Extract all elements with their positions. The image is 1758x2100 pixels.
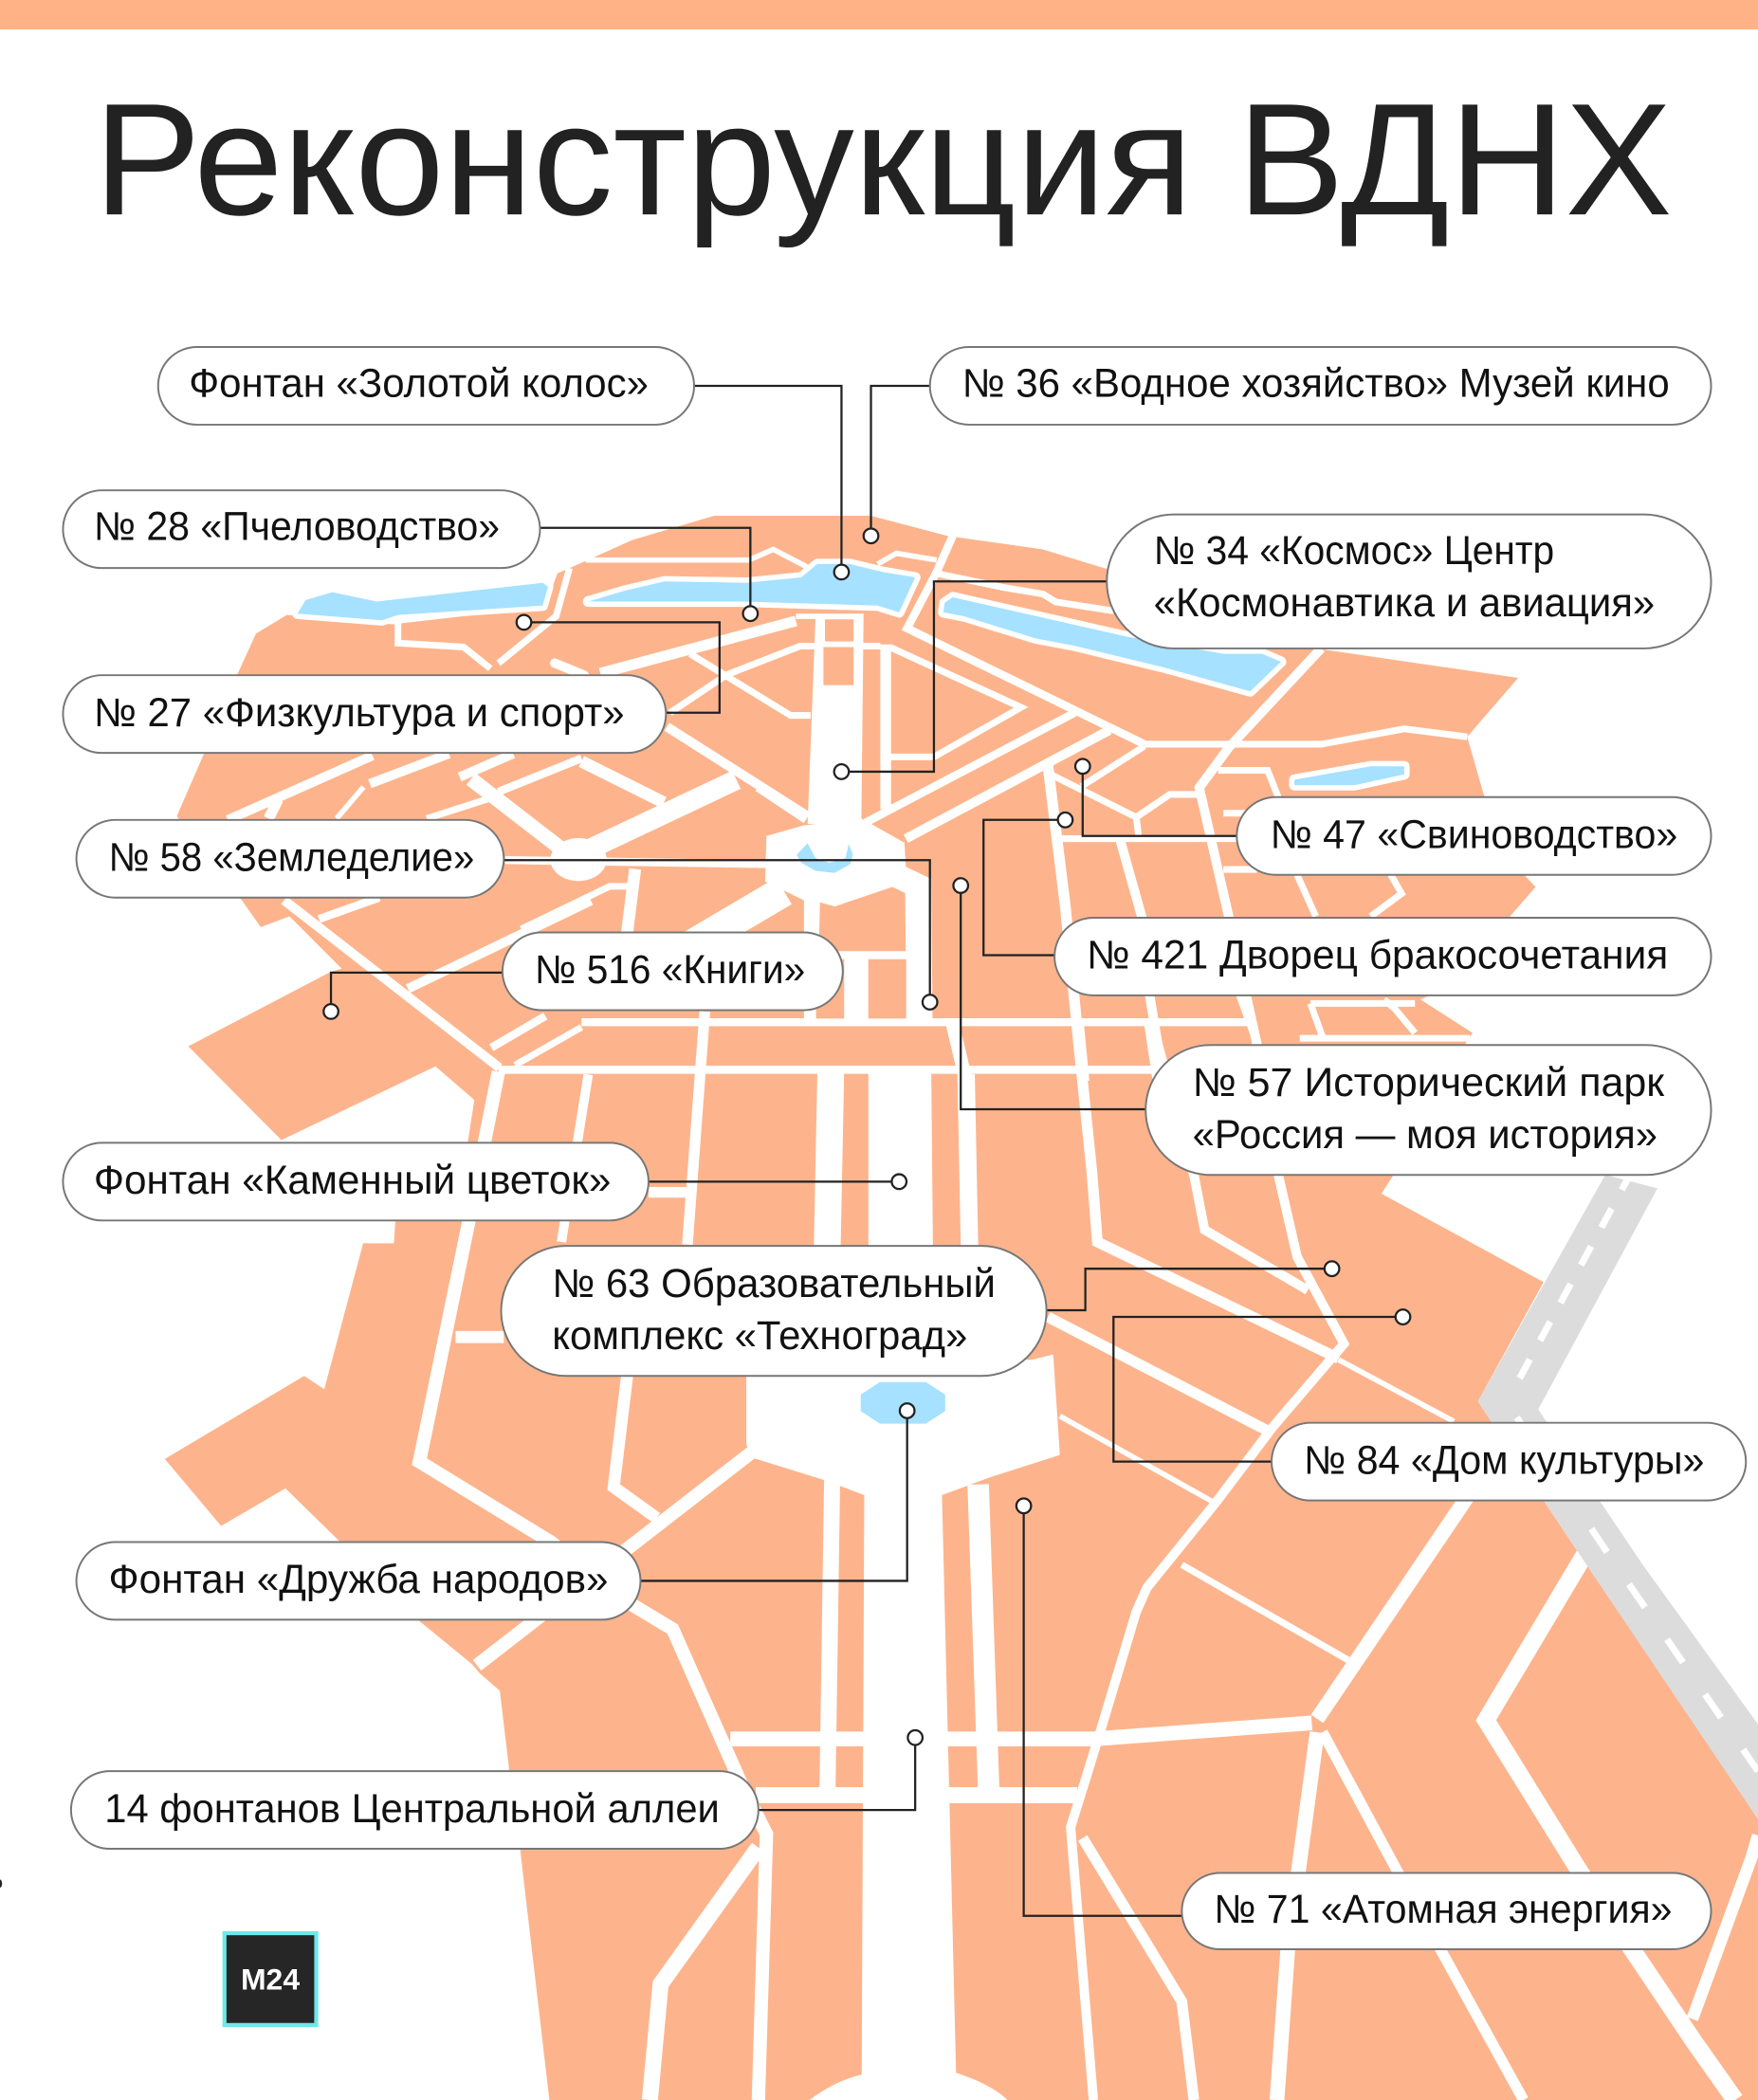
connector: Пчеловодство bbox=[540, 528, 758, 621]
label: № 84 bbox=[1272, 1423, 1746, 1501]
label: Фонтан «Золотой колос»: Фонтан «Золотой колос» bbox=[189, 360, 649, 405]
label: № 28: № 28 «Пчеловодство» bbox=[94, 503, 500, 548]
label: № 58 bbox=[77, 820, 504, 898]
connector: Золотой колос bbox=[694, 386, 849, 579]
label: 14 фонтанов: 14 фонтанов Центральной аллеи bbox=[104, 1786, 720, 1831]
title: Реконструкция ВДНХ bbox=[94, 70, 1673, 248]
label: № 34 bbox=[1107, 515, 1712, 648]
label: Фонтан «Золотой колос» bbox=[158, 347, 694, 425]
central alley and squares bbox=[550, 613, 1060, 2100]
label: № 516: № 516 «Книги» bbox=[535, 947, 805, 992]
label: № 58: № 58 «Земледелие» bbox=[108, 835, 474, 880]
map of VDNKh bbox=[165, 516, 1758, 2100]
connector: Физкультура и спорт bbox=[517, 615, 720, 713]
blocks along the alley bbox=[816, 619, 906, 1340]
label: № 34: № 34 «Космос» Центр bbox=[1154, 528, 1554, 573]
label: № 36 bbox=[930, 347, 1712, 425]
label: № 516 bbox=[503, 933, 843, 1010]
label: Дружба народов bbox=[77, 1542, 640, 1619]
label: Каменный цветок: Фонтан «Каменный цветок» bbox=[94, 1158, 611, 1202]
label: № 47: № 47 «Свиноводство» bbox=[1271, 812, 1677, 856]
label: № 47 bbox=[1236, 797, 1712, 875]
connector: Атомная энергия bbox=[1016, 1499, 1181, 1916]
connector: Книги bbox=[323, 973, 503, 1019]
label: Дружба народов: Фонтан «Дружба народов» bbox=[108, 1557, 609, 1601]
label: № 71 bbox=[1181, 1872, 1712, 1949]
top bar bbox=[0, 0, 1758, 29]
label: № 63: № 63 Образовательный bbox=[552, 1261, 996, 1306]
connector: Дворец бракосочетания bbox=[983, 813, 1072, 956]
connector: Исторический парк bbox=[953, 878, 1145, 1109]
label: № 57: «Россия — моя история» bbox=[1193, 1112, 1657, 1157]
label: № 28 bbox=[63, 490, 540, 568]
label: № 71: № 71 «Атомная энергия» bbox=[1214, 1887, 1673, 1931]
road network bbox=[228, 536, 1758, 2100]
label: № 63 bbox=[502, 1246, 1047, 1376]
logo M24: M24 bbox=[241, 1963, 301, 1996]
connector: Свиноводство bbox=[1075, 759, 1236, 836]
label: № 27 bbox=[63, 675, 666, 753]
label: № 84: № 84 «Дом культуры» bbox=[1304, 1437, 1704, 1482]
connector: Водное хозяйство bbox=[864, 386, 930, 543]
connector: Дом культуры bbox=[1113, 1309, 1410, 1462]
label: № 63: комплекс «Техноград» bbox=[552, 1313, 967, 1358]
label: Каменный цветок bbox=[63, 1142, 649, 1220]
highway bbox=[1478, 1171, 1758, 1819]
connector: 14 фонтанов bbox=[759, 1730, 923, 1810]
connector: Земледелие bbox=[504, 860, 937, 1010]
label: 14 фонтанов bbox=[71, 1771, 759, 1849]
connector: Дружба народов bbox=[640, 1403, 914, 1580]
label: № 36: № 36 «Водное хозяйство» Музей кино bbox=[962, 360, 1670, 405]
ponds bbox=[298, 564, 1404, 785]
label: № 421: № 421 Дворец бракосочетания bbox=[1087, 933, 1668, 977]
fountain Druzhba Narodov pool bbox=[861, 1382, 945, 1424]
connector: Каменный цветок bbox=[649, 1175, 906, 1189]
label: № 421 bbox=[1054, 918, 1712, 995]
connector: Техноград bbox=[1047, 1261, 1339, 1310]
label: № 27: № 27 «Физкультура и спорт» bbox=[94, 690, 625, 735]
logo M24 bbox=[225, 1933, 317, 2025]
fountain Kamenny Tsvetok pool crescent bbox=[797, 843, 852, 873]
connector lines and markers bbox=[323, 386, 1410, 1916]
label: № 34: «Космонавтика и авиация» bbox=[1154, 580, 1655, 625]
label: № 57: № 57 Исторический парк bbox=[1193, 1060, 1665, 1105]
connector: Космос bbox=[834, 581, 1107, 779]
map territory bbox=[165, 516, 1758, 2100]
label: № 57 bbox=[1145, 1045, 1712, 1175]
